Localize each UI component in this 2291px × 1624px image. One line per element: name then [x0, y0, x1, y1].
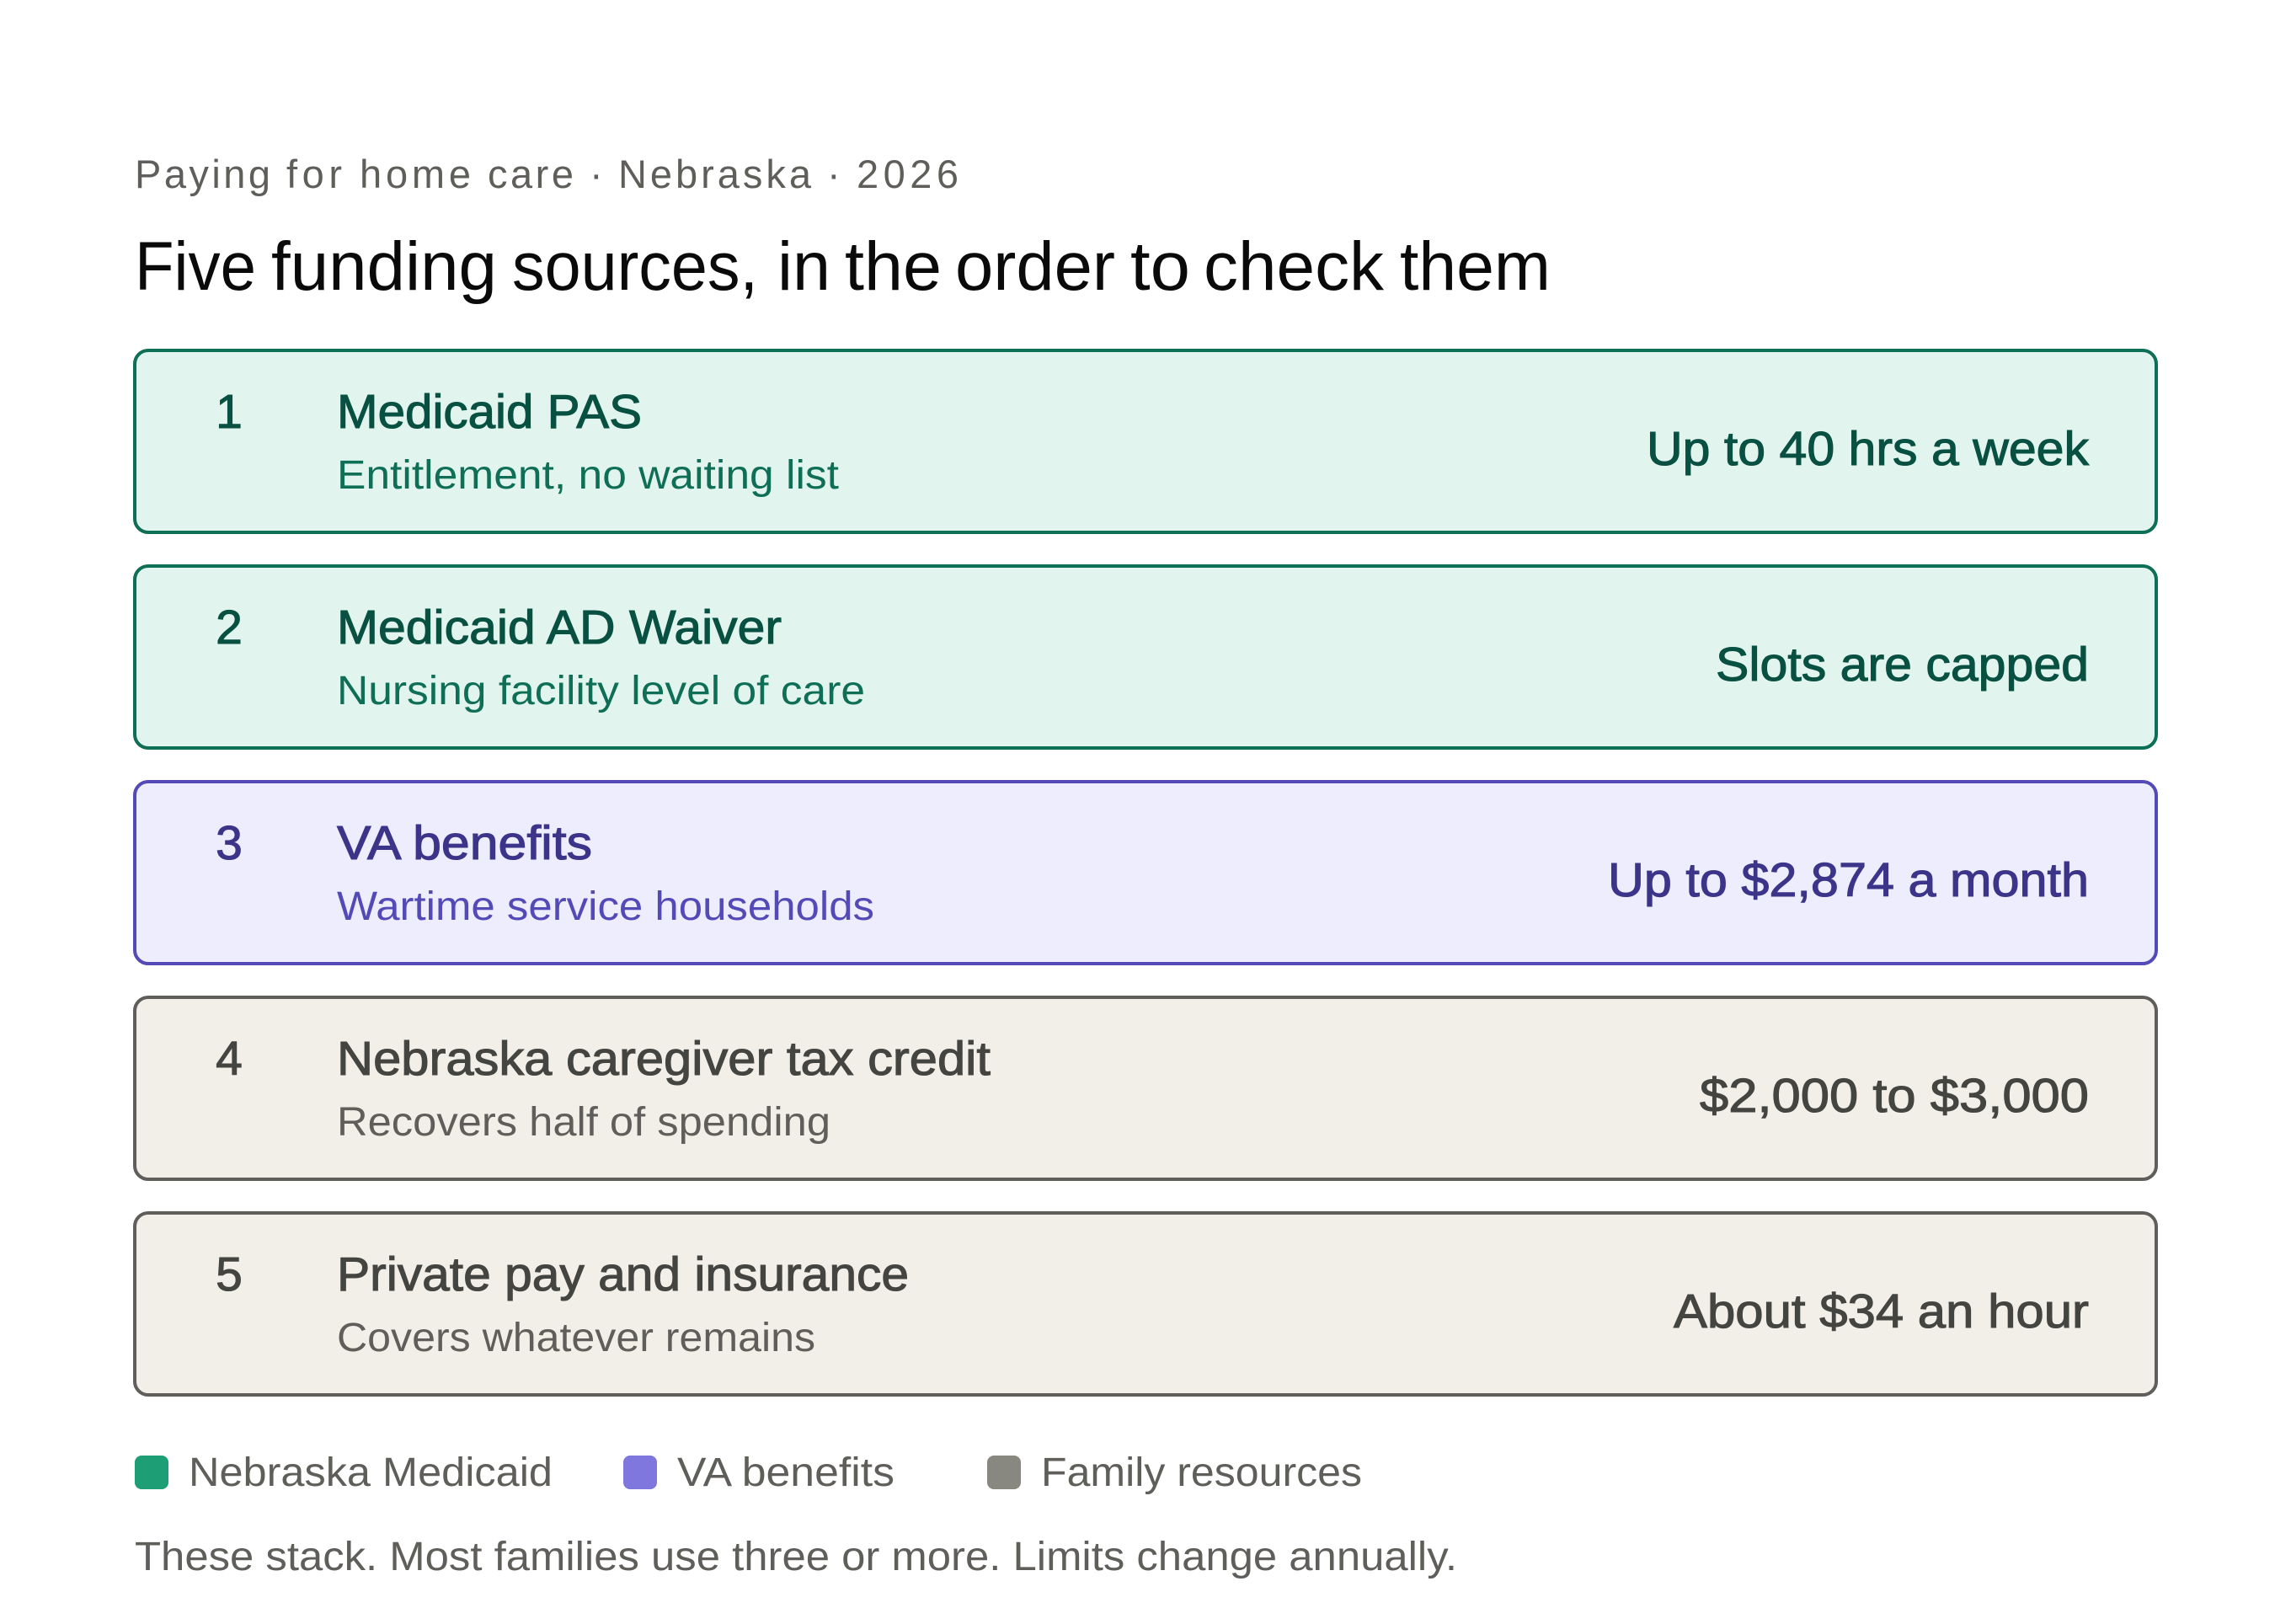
eyebrow: ·: [590, 152, 603, 196]
eyebrow: for: [286, 152, 342, 196]
title: in: [777, 228, 830, 305]
title: funding: [271, 228, 497, 305]
eyebrow: ·: [827, 152, 841, 196]
legend item: VA benefits: VA benefits: [677, 1450, 895, 1495]
footnote: These stack. Most families use three or more. Limits change annually.: [135, 1535, 1457, 1579]
description: Private pay and insurance: Covers whatever remains: [337, 1316, 815, 1360]
eyebrow: Paying: [135, 152, 270, 196]
eyebrow: 2026: [857, 152, 959, 196]
description: Nebraska caregiver tax credit: Recovers half of spending: [337, 1100, 830, 1145]
panel: Nebraska caregiver tax credit: [135, 997, 2156, 1179]
title: Five: [135, 228, 256, 305]
description: Medicaid AD Waiver: Nursing facility level of care: [337, 669, 865, 713]
legend: [135, 1450, 1362, 1495]
legend item: Family resources: Family resources: [1041, 1450, 1362, 1495]
panel: VA benefits: [135, 782, 2156, 964]
value: VA benefits: Up to $2,874 a month: [1608, 853, 2089, 907]
step number 2: 2: [216, 601, 243, 654]
description: Medicaid PAS: Entitlement, no waiting list: [337, 453, 839, 498]
name: Medicaid PAS: Medicaid PAS: [337, 385, 642, 439]
eyebrow: Nebraska: [618, 152, 812, 196]
value: Medicaid AD Waiver: Slots are capped: [1716, 638, 2089, 692]
eyebrow: home: [360, 152, 471, 196]
step number 3: 3: [216, 816, 243, 870]
step number 1: 1: [216, 385, 243, 439]
legend item: Nebraska Medicaid: Nebraska Medicaid: [189, 1450, 553, 1495]
panel: Medicaid PAS: [135, 350, 2156, 532]
title: them: [1400, 228, 1551, 305]
value: Medicaid PAS: Up to 40 hrs a week: [1647, 422, 2090, 476]
title: check: [1204, 228, 1385, 305]
name: Medicaid AD Waiver: Medicaid AD Waiver: [337, 601, 782, 654]
title: to: [1130, 228, 1190, 305]
name: VA benefits: VA benefits: [337, 816, 592, 870]
title: the: [845, 228, 942, 305]
title: sources,: [512, 228, 758, 305]
eyebrow: care: [488, 152, 574, 196]
name: Private pay and insurance: Private pay and insurance: [337, 1247, 909, 1301]
panel: Medicaid AD Waiver: [135, 566, 2156, 748]
name: Nebraska caregiver tax credit: Nebraska caregiver tax credit: [337, 1032, 991, 1086]
value: Private pay and insurance: About $34 an hour: [1674, 1285, 2089, 1338]
step number 5: 5: [216, 1247, 243, 1301]
description: VA benefits: Wartime service households: [337, 884, 874, 929]
title: order: [955, 228, 1115, 305]
panel: Private pay and insurance: [135, 1213, 2156, 1395]
step number 4: 4: [216, 1032, 243, 1086]
value: Nebraska caregiver tax credit: $2,000 to $3,000: [1700, 1069, 2089, 1123]
